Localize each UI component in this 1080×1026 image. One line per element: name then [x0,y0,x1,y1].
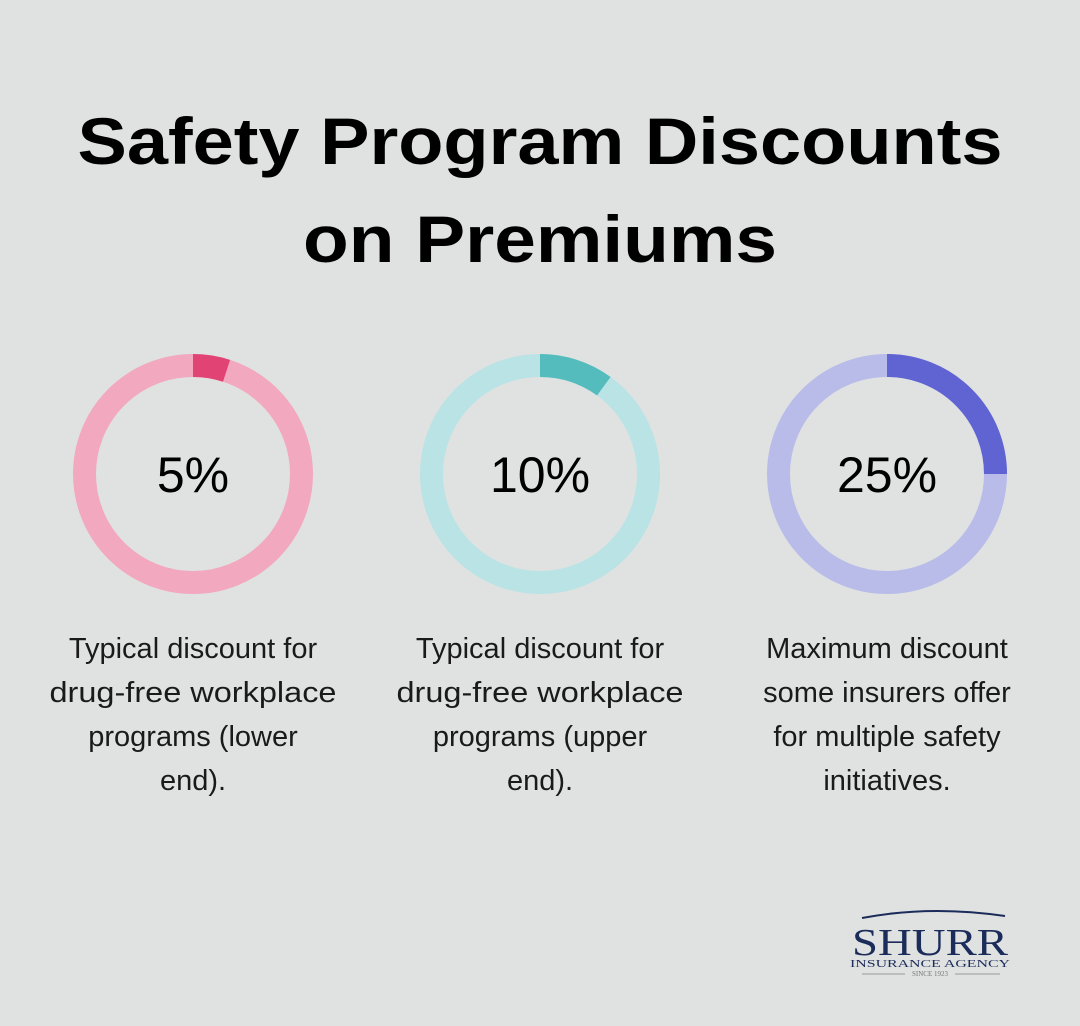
logo: Shurr Insurance Agency [850,911,1010,978]
donut: 5% [84,366,302,582]
text: 5% description [50,633,336,797]
donut: 10%: 10% [490,447,590,503]
text: 10% description: drug-free workplace [396,677,684,709]
logo: Shurr Insurance Agency: SHURR [852,922,1009,964]
donut: 10% [432,366,648,582]
text: 25% description: some insurers offer [763,677,1011,709]
donut: 5%: 5% [157,447,229,503]
text: 25% description [763,633,1011,797]
title: Safety Program Discounts [78,104,1002,178]
donut: 25%: 25% [837,447,937,503]
text: 5% description: drug-free workplace [50,677,336,709]
text: 5% description: Typical discount for [69,633,317,665]
text: 25% description: initiatives. [823,765,951,797]
text: 5% description: end). [160,765,226,797]
text: 5% description: programs (lower [88,721,298,753]
logo: Shurr Insurance Agency: INSURANCE AGENCY [850,958,1010,970]
text: 10% description: Typical discount for [416,633,664,665]
text: 10% description: end). [507,765,573,797]
donut: 25% [778,366,996,582]
text: 25% description: for multiple safety [773,721,1001,753]
text: 10% description [396,633,684,797]
title [78,104,1002,276]
logo: Shurr Insurance Agency: SINCE 1923 [912,970,948,978]
text: 10% description: programs (upper [433,721,648,753]
text: 25% description: Maximum discount [766,633,1008,665]
title: on Premiums [303,202,777,276]
